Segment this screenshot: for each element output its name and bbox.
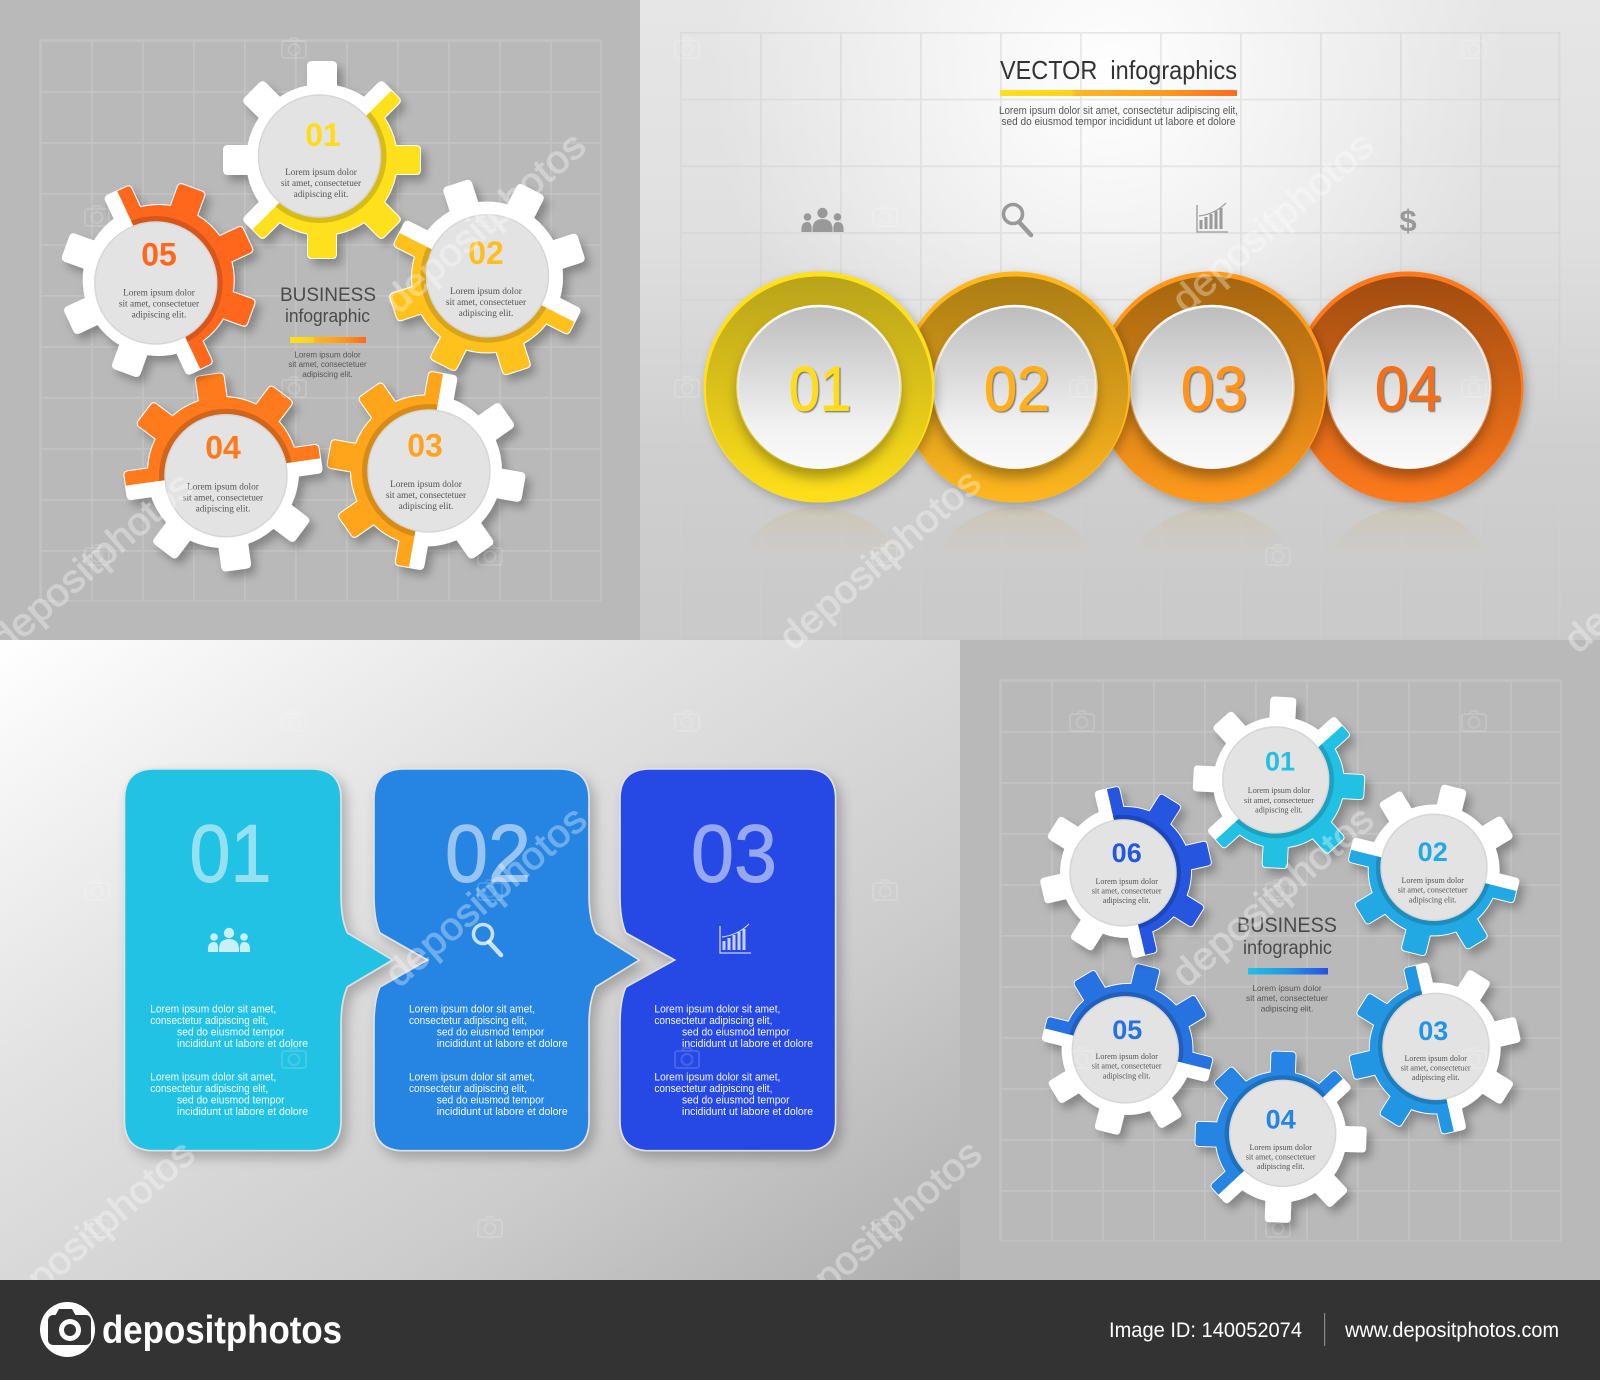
- centre heading: adipiscing elit.: [302, 370, 353, 379]
- gear 05: [62, 183, 264, 386]
- blue gear 04: adipiscing elit.: [1257, 1162, 1305, 1171]
- card 02: [374, 769, 639, 1151]
- card 02: incididunt ut labore et dolore: [437, 1038, 568, 1050]
- circle 03: [1096, 272, 1326, 502]
- title: vector infographics: VECTOR infographics: [1000, 55, 1237, 85]
- card 03: consectetur adipiscing elit,: [654, 1083, 772, 1095]
- gear 05: adipiscing elit.: [132, 310, 186, 320]
- blue gear 01: adipiscing elit.: [1255, 806, 1303, 814]
- title: vector infographics: [999, 55, 1238, 128]
- blue gear 06: Lorem ipsum dolor: [1095, 877, 1158, 886]
- icon: magnifier: [1004, 204, 1031, 235]
- watermark text: depositphotos: [377, 798, 595, 995]
- blue gear 02: sit amet, consectetuer: [1398, 886, 1468, 895]
- gear 02: Lorem ipsum dolor: [450, 287, 523, 297]
- card 02: consectetur adipiscing elit,: [409, 1083, 527, 1095]
- blue gear 06: adipiscing elit.: [1103, 896, 1151, 905]
- centre heading: Lorem ipsum dolor: [294, 350, 361, 360]
- watermark text: depositphotos: [376, 124, 594, 321]
- centre heading blue: [1237, 914, 1337, 1014]
- card 03: sed do eiusmod tempor: [682, 1026, 790, 1038]
- gear 03: [326, 371, 534, 580]
- centre heading blue: adipiscing elit.: [1261, 1004, 1313, 1014]
- gear 01: sit amet, consectetuer: [281, 179, 362, 189]
- blue gear 03: Lorem ipsum dolor: [1404, 1054, 1467, 1063]
- footer logo: depositphotos: [102, 1309, 342, 1352]
- blue gear 05: adipiscing elit.: [1103, 1071, 1151, 1080]
- blue gear 05: 05: [1112, 1015, 1142, 1045]
- title: vector infographics: Lorem ipsum dolor sit amet, consectetur adipiscing elit,: [999, 105, 1238, 117]
- title: vector infographics: sed do eiusmod tempor incididunt ut labore et dolore: [1002, 116, 1236, 128]
- card 01: incididunt ut labore et dolore: [177, 1106, 308, 1118]
- blue gear 03: [1349, 962, 1529, 1144]
- footer divider: [1324, 1313, 1325, 1346]
- panel: orange gears: [62, 61, 593, 581]
- card 03: consectetur adipiscing elit,: [654, 1015, 772, 1027]
- watermark text: depositphotos: [1164, 798, 1382, 995]
- blue gear 04: [1194, 1050, 1376, 1233]
- blue gear 05: Lorem ipsum dolor: [1095, 1052, 1158, 1061]
- footer logo: [40, 1302, 342, 1357]
- circle 01: 01: [789, 354, 851, 424]
- icon: dollar: $: [1399, 203, 1417, 238]
- circle 01: [704, 272, 934, 502]
- gear 02: 02: [468, 235, 504, 271]
- centre heading blue: sit amet, consectetuer: [1246, 993, 1328, 1003]
- footer url: www.depositphotos.com: [1344, 1318, 1559, 1342]
- card 02: Lorem ipsum dolor sit amet,: [409, 1072, 535, 1084]
- footer bar: [0, 1280, 1600, 1380]
- centre heading blue: BUSINESS: [1237, 914, 1337, 937]
- gear 01: 01: [305, 117, 341, 153]
- watermark cameras: [85, 38, 1486, 1237]
- gear 04: 04: [205, 430, 241, 466]
- panel: vector infographics background: [640, 0, 1600, 640]
- gear 03: 03: [407, 428, 443, 464]
- card 02: Lorem ipsum dolor sit amet,: [409, 1004, 535, 1016]
- footer image id: Image ID: 140052074: [1109, 1318, 1302, 1342]
- blue gear 01: Lorem ipsum dolor: [1248, 786, 1311, 795]
- card 01: 01: [190, 808, 272, 900]
- card 03: [620, 769, 836, 1151]
- blue gear 05: [1042, 963, 1222, 1144]
- gear 03: sit amet, consectetuer: [386, 491, 467, 501]
- circle 02: 02: [984, 354, 1050, 424]
- card 01: sed do eiusmod tempor: [177, 1094, 285, 1106]
- icon: chart: [1197, 203, 1228, 232]
- gear 05: 05: [141, 236, 177, 272]
- card 02: 02: [445, 808, 531, 900]
- gear 02: adipiscing elit.: [459, 309, 513, 319]
- gear 05: sit amet, consectetuer: [119, 300, 200, 310]
- circle reflections: [729, 507, 1499, 687]
- card 03: 03: [691, 808, 777, 900]
- circle 04: [1292, 272, 1524, 502]
- card 03: incididunt ut labore et dolore: [682, 1038, 813, 1050]
- blue gear 06: 06: [1112, 838, 1142, 868]
- blue gear 02: adipiscing elit.: [1409, 895, 1457, 904]
- blue gear 03: sit amet, consectetuer: [1401, 1063, 1471, 1072]
- centre heading blue: infographic: [1243, 938, 1332, 959]
- card 02: consectetur adipiscing elit,: [409, 1015, 527, 1027]
- blue gear 02: Lorem ipsum dolor: [1401, 876, 1464, 885]
- card 03: sed do eiusmod tempor: [682, 1094, 790, 1106]
- gear 04: adipiscing elit.: [196, 504, 250, 514]
- blue gear 04: Lorem ipsum dolor: [1249, 1143, 1312, 1152]
- gear 05: Lorem ipsum dolor: [123, 288, 196, 298]
- card 02: sed do eiusmod tempor: [437, 1026, 545, 1038]
- watermark text: depositphotos: [771, 461, 989, 658]
- card 02: incididunt ut labore et dolore: [437, 1106, 568, 1118]
- centre heading: BUSINESS: [280, 285, 376, 306]
- blue gear 02: [1348, 784, 1528, 964]
- blue gear 06: [1040, 786, 1220, 968]
- circle 03: 03: [1181, 354, 1247, 424]
- blue gear 01: sit amet, consectetuer: [1244, 796, 1314, 805]
- circle 02: [900, 272, 1130, 502]
- blue gear 04: sit amet, consectetuer: [1246, 1153, 1316, 1162]
- gear 04: [124, 372, 332, 581]
- blue gear 01: [1192, 696, 1374, 879]
- card 03: Lorem ipsum dolor sit amet,: [654, 1004, 780, 1016]
- panel: blue gears background: [960, 640, 1600, 1280]
- centre heading: sit amet, consectetuer: [288, 360, 367, 369]
- gear 04: Lorem ipsum dolor: [187, 482, 260, 492]
- gear 02: sit amet, consectetuer: [446, 298, 527, 308]
- centre heading: [280, 285, 376, 379]
- card 01: Lorem ipsum dolor sit amet,: [150, 1072, 276, 1084]
- gear 03: adipiscing elit.: [399, 502, 453, 512]
- card 03: Lorem ipsum dolor sit amet,: [654, 1072, 780, 1084]
- blue gear 06: sit amet, consectetuer: [1092, 886, 1162, 895]
- icon: people: [801, 208, 844, 232]
- gear 04: sit amet, consectetuer: [183, 494, 264, 504]
- panel: blue gears: [1040, 696, 1529, 1233]
- card 01: Lorem ipsum dolor sit amet,: [150, 1004, 276, 1016]
- blue gear 05: sit amet, consectetuer: [1092, 1062, 1162, 1071]
- watermark text: depositphotos: [772, 1132, 990, 1329]
- gear 01: Lorem ipsum dolor: [285, 168, 358, 178]
- gear 01: adipiscing elit.: [294, 190, 348, 200]
- blue gear 04: 04: [1266, 1105, 1296, 1135]
- panel: blue cards background: [0, 640, 960, 1280]
- card 01: [124, 769, 393, 1151]
- gear 03: Lorem ipsum dolor: [390, 480, 463, 490]
- circle 04: 04: [1375, 354, 1441, 424]
- blue gear 03: 03: [1418, 1016, 1448, 1046]
- centre heading blue: Lorem ipsum dolor: [1252, 983, 1322, 993]
- watermark text: depositphotos: [1164, 124, 1382, 321]
- card 01: consectetur adipiscing elit,: [150, 1015, 268, 1027]
- card 01: incididunt ut labore et dolore: [177, 1038, 308, 1050]
- card 02: sed do eiusmod tempor: [437, 1094, 545, 1106]
- centre heading: infographic: [285, 306, 370, 326]
- card 01: sed do eiusmod tempor: [177, 1026, 285, 1038]
- gear 02: [389, 180, 593, 384]
- blue gear 02: 02: [1418, 837, 1448, 867]
- gear 01: [223, 61, 430, 270]
- blue gear 03: adipiscing elit.: [1412, 1073, 1460, 1082]
- card 01: consectetur adipiscing elit,: [150, 1083, 268, 1095]
- card 03: incididunt ut labore et dolore: [682, 1106, 813, 1118]
- blue gear 01: 01: [1265, 747, 1295, 777]
- panel: orange gears background: [0, 0, 640, 640]
